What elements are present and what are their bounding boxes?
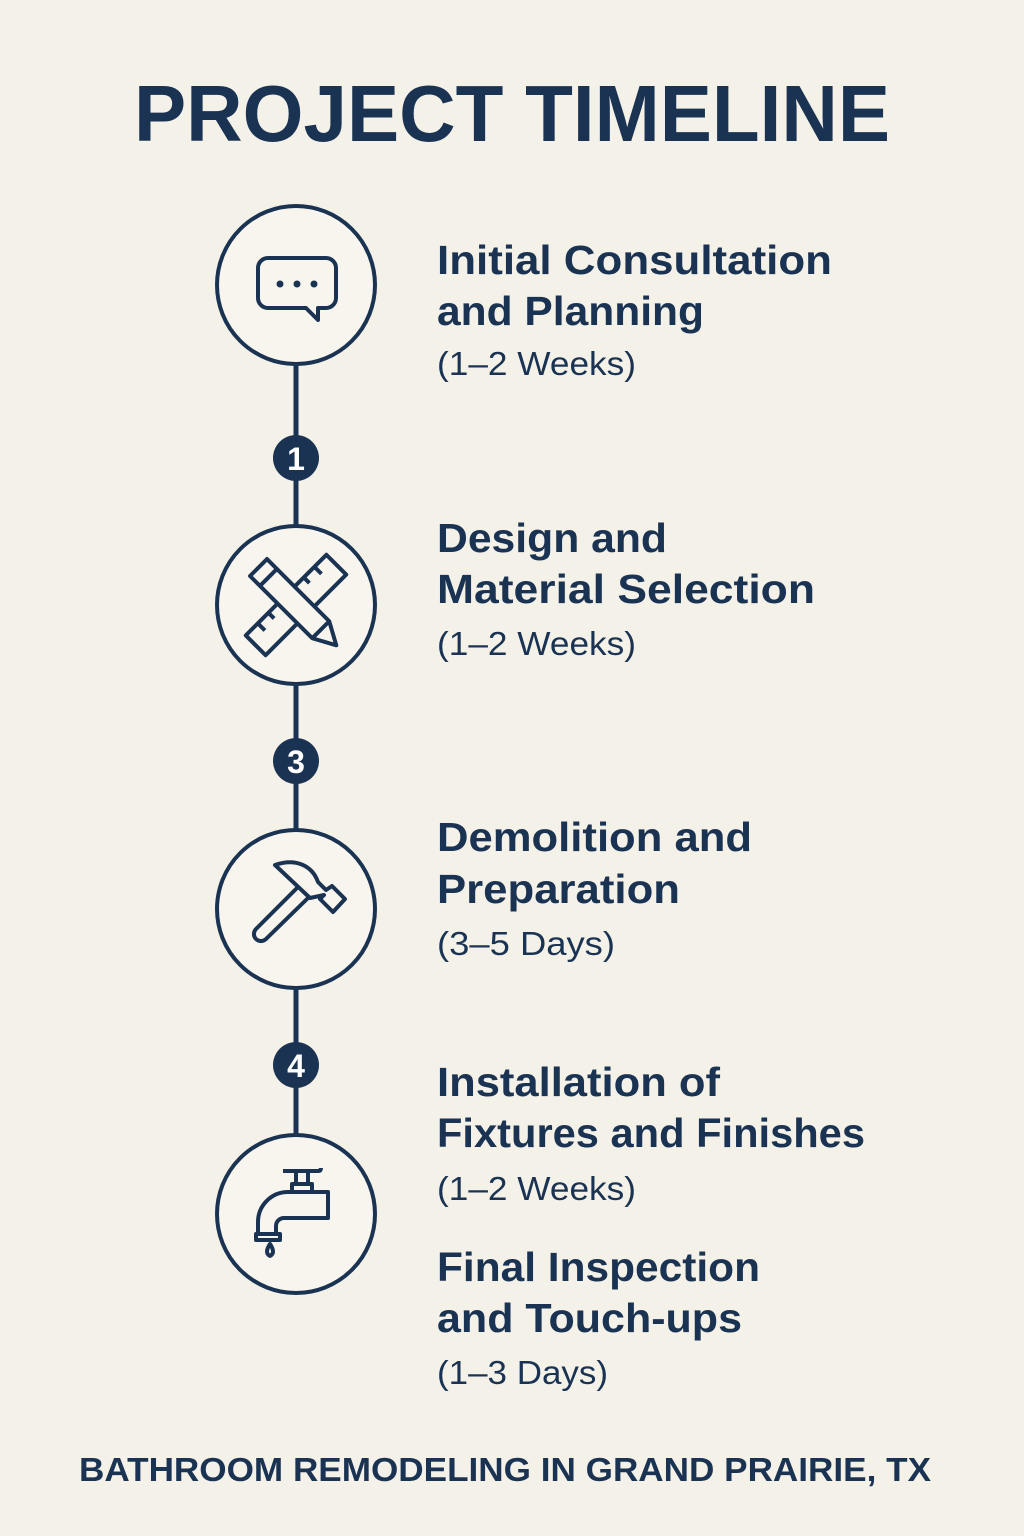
step 3 text: Demolition and <box>437 814 752 860</box>
badge 1: 1 <box>287 441 305 477</box>
footer: BATHROOM REMODELING IN GRAND PRAIRIE, TX <box>79 1451 931 1488</box>
step 1 text: Initial Consultation <box>437 237 832 283</box>
step 5 text <box>437 1244 760 1391</box>
badge 4 <box>273 1042 319 1088</box>
step 2 text: (1–2 Weeks) <box>437 625 636 662</box>
badge 4: 4 <box>287 1048 305 1084</box>
step 4 text: Installation of <box>437 1059 720 1105</box>
badge 3: 3 <box>287 744 305 780</box>
badge 1 <box>273 435 319 481</box>
step 1 icon: speech bubble <box>217 206 375 364</box>
step 3 text: Preparation <box>437 866 680 912</box>
step 2 text: Design and <box>437 515 667 561</box>
step 3 text <box>437 814 752 962</box>
step 1 text <box>437 237 832 382</box>
step 5 text: and Touch-ups <box>437 1295 742 1341</box>
step 3 text: (3–5 Days) <box>437 925 615 962</box>
step 1 text: (1–2 Weeks) <box>437 345 636 382</box>
title: PROJECT TIMELINE <box>134 69 890 158</box>
step 1 text: and Planning <box>437 288 704 334</box>
step 2 text <box>437 515 815 662</box>
timeline line <box>294 360 298 1140</box>
step 4 text: Fixtures and Finishes <box>437 1110 865 1156</box>
step 2 icon: ruler and pencil <box>217 526 375 684</box>
step 5 text: Final Inspection <box>437 1244 760 1290</box>
badge 3 <box>273 738 319 784</box>
step 2 text: Material Selection <box>437 566 815 612</box>
step 3 icon: hammer <box>217 830 375 988</box>
step 5 text: (1–3 Days) <box>437 1354 608 1391</box>
step 4 text <box>437 1059 865 1207</box>
step 4 icon: faucet <box>217 1135 375 1293</box>
step 4 text: (1–2 Weeks) <box>437 1170 636 1207</box>
